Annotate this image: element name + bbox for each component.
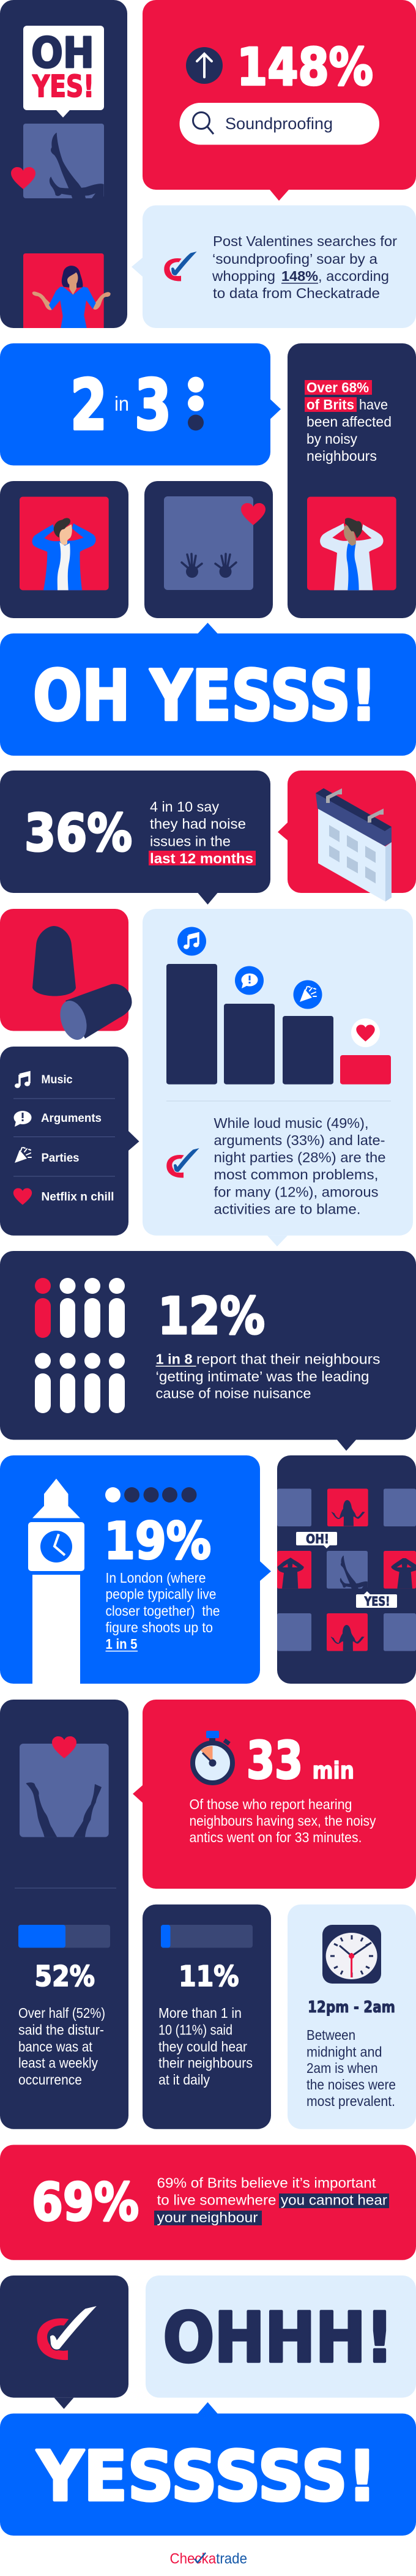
legend item: netflix n chill: Netflix n chill xyxy=(42,1191,114,1203)
text: post valentines: Post Valentines searches for xyxy=(213,233,397,249)
icon: big ben xyxy=(28,1479,84,1684)
text: in london: people typically live xyxy=(105,1586,217,1602)
illustration: legs in window xyxy=(23,124,104,198)
panel: yesssss banner xyxy=(0,2402,416,2536)
panel: 33 min xyxy=(133,1700,416,1889)
icon: heart circle xyxy=(351,1018,380,1047)
icon: music circle xyxy=(177,927,206,956)
logo: checkatrade: Checkatrade xyxy=(170,2551,247,2567)
icon: heart xyxy=(241,503,266,525)
illustration: man in white coat xyxy=(307,497,396,590)
icon: up arrow xyxy=(186,47,223,84)
text: in london xyxy=(105,1570,220,1652)
panel: apartment block xyxy=(277,1455,416,1684)
text: while loud music: arguments (33%) and late- xyxy=(214,1132,385,1148)
search bar: Soundproofing xyxy=(225,114,333,133)
panel: oh yes column xyxy=(0,0,127,328)
illustration: shrugging woman xyxy=(23,253,111,328)
text: post valentines: whopping xyxy=(212,268,275,284)
text: post valentines: 148% xyxy=(281,268,318,284)
text: while loud music: activities are to blame. xyxy=(214,1201,361,1217)
text: over half: said the distur- xyxy=(18,2022,104,2038)
text: 69% of brits: 69% of Brits believe it’s important xyxy=(157,2175,376,2191)
text: while loud music: most common problems, xyxy=(214,1167,378,1182)
windows grid xyxy=(277,1488,416,1651)
panel: logo tick xyxy=(0,2275,128,2409)
text: more than 1 in 10: at it daily xyxy=(158,2072,210,2088)
text: in london: 1 in 5 xyxy=(105,1636,137,1652)
icon: 8 people pictogram xyxy=(35,1278,125,1413)
text: 69% of brits: you cannot hear xyxy=(281,2192,387,2208)
text: over half: occurrence xyxy=(18,2072,82,2088)
panel: 148% search stat xyxy=(143,0,416,201)
text: 69% of brits: your neighbour xyxy=(157,2209,258,2225)
icon: clock xyxy=(322,1925,381,1984)
text: over half: Over half (52%) xyxy=(18,2005,105,2021)
panel: 19% london xyxy=(0,1455,271,1684)
text: 4 in 10: they had noise xyxy=(150,816,246,832)
text: more than 1 in 10: More than 1 in xyxy=(158,2005,242,2021)
icon: stopwatch xyxy=(193,1731,232,1783)
text: between midnight: 2am is when xyxy=(306,2060,378,2076)
panel: 12% one in eight xyxy=(0,1251,416,1450)
panel: yesssss banner: YESSSSS! xyxy=(36,2437,377,2517)
panel: 33 min: 33 xyxy=(247,1731,303,1791)
speech bubble: oh yes xyxy=(23,26,104,118)
icon: checkatrade tick white xyxy=(37,2306,97,2360)
panel: earplugs xyxy=(0,909,132,1043)
speech bubble: oh xyxy=(296,1531,337,1548)
text: over half xyxy=(18,2005,105,2088)
panel: ohhh xyxy=(146,2275,416,2398)
icon: earplug tilted xyxy=(56,984,132,1043)
progress bar: 52% xyxy=(18,1925,110,1947)
legend item: parties: Parties xyxy=(42,1152,80,1165)
icon: calendar xyxy=(316,788,392,902)
speech bubble: oh: OH! xyxy=(306,1531,329,1546)
panel: post valentines text xyxy=(132,206,416,328)
text: between midnight: the noises were xyxy=(306,2077,396,2093)
text: over 68%: Over 68% xyxy=(306,379,369,395)
panel: hands on window xyxy=(144,481,273,618)
icon: checkatrade tick xyxy=(164,252,197,281)
text: more than 1 in 10: their neighbours xyxy=(158,2055,253,2071)
text: over half: least a weekly xyxy=(18,2055,98,2071)
speech bubble: yes xyxy=(356,1591,397,1608)
text: of those: Of those who report hearing xyxy=(190,1796,352,1812)
panel: 2 in 3 xyxy=(0,343,281,465)
panel: 2 in 3: 2 xyxy=(70,365,107,446)
icon: party circle xyxy=(294,980,322,1009)
icon: heart xyxy=(11,167,35,189)
text: 1 in 8: ‘getting intimate’ was the leading xyxy=(155,1368,370,1384)
icon: earplug upright xyxy=(32,926,76,996)
text: post valentines: to data from Checkatrade xyxy=(213,285,380,301)
text: of those: antics went on for 33 minutes. xyxy=(190,1829,362,1845)
text: over 68%: of Brits xyxy=(306,397,354,413)
text: in london: In London (where xyxy=(105,1570,206,1586)
legend item: music xyxy=(15,1072,73,1088)
legend item: arguments xyxy=(13,1111,102,1127)
icon: heart xyxy=(52,1736,76,1758)
text: of those xyxy=(190,1796,376,1845)
bar chart xyxy=(166,964,391,1085)
panel: legs and 52% stat xyxy=(0,1700,128,2129)
panel: 12pm - 2am: 12pm - 2am xyxy=(308,1998,395,2017)
speech bubble: yes: YES! xyxy=(364,1594,390,1608)
panel: man in blue jacket xyxy=(0,481,128,618)
panel: 2 in 3: 3 xyxy=(135,365,171,446)
text: 1 in 8 xyxy=(155,1351,381,1402)
panel: 69%: 69% xyxy=(32,2173,139,2233)
text: 1 in 8: report that their neighbours xyxy=(196,1351,381,1367)
panel: 2 in 3: in xyxy=(114,392,129,415)
text: between midnight: midnight and xyxy=(306,2044,382,2060)
panel: oh yesss banner xyxy=(0,623,416,756)
panel: legend xyxy=(0,1047,139,1236)
text: 1 in 8: cause of noise nuisance xyxy=(155,1386,311,1402)
panel: 12% one in eight: 12% xyxy=(158,1286,265,1346)
icon: 1 in 5 dots xyxy=(105,1487,197,1503)
speech bubble: oh yes: YES! xyxy=(32,69,94,104)
text: in london: closer together) the xyxy=(105,1603,220,1619)
panel: over 68% of brits xyxy=(288,343,416,618)
text: over 68%: been affected xyxy=(306,414,392,430)
panel: 36% noise issues xyxy=(0,771,270,905)
text: 1 in 8: 1 in 8 xyxy=(155,1351,192,1367)
text: in london: figure shoots up to xyxy=(105,1619,213,1635)
text: 69% of brits: to live somewhere xyxy=(157,2192,277,2208)
text: more than 1 in 10: 10 (11%) said xyxy=(158,2022,232,2038)
text: over 68%: by noisy xyxy=(306,431,357,447)
text: while loud music: night parties (28%) are the xyxy=(214,1149,385,1165)
icon: argument circle xyxy=(235,966,264,995)
panel: noise causes bar chart xyxy=(143,909,413,1246)
icon: checkatrade tick xyxy=(166,1148,199,1178)
text: between midnight: most prevalent. xyxy=(306,2093,395,2109)
text: post valentines xyxy=(212,233,397,301)
text: over 68%: neighbours xyxy=(306,448,377,464)
panel: 19% london: 19% xyxy=(104,1512,211,1570)
text: 4 in 10: last 12 months xyxy=(150,851,253,867)
text: 4 in 10: issues in the xyxy=(150,834,231,849)
panel: calendar xyxy=(278,771,416,902)
speech bubble: oh yes: OH xyxy=(31,29,94,78)
text: while loud music: for many (12%), amorous xyxy=(214,1184,378,1200)
icon: hand prints xyxy=(182,554,236,578)
panel: 69% xyxy=(0,2145,416,2260)
progress bar: 11% xyxy=(161,1925,253,1947)
panel: 11% stat: 11% xyxy=(179,1960,239,1993)
text: of those: neighbours having sex, the noisy xyxy=(190,1813,376,1829)
legend item: music: Music xyxy=(42,1073,73,1086)
text: over half: bance was at xyxy=(18,2039,92,2055)
text: over 68% xyxy=(305,379,392,464)
text: between midnight: Between xyxy=(306,2027,355,2043)
text: while loud music: While loud music (49%), xyxy=(214,1115,368,1131)
stat: 148%: 148% xyxy=(237,37,373,97)
legend item: arguments: Arguments xyxy=(41,1112,102,1125)
text: post valentines: ‘soundproofing’ soar by a xyxy=(212,251,378,267)
legend item: netflix n chill xyxy=(13,1188,114,1205)
search bar xyxy=(180,103,379,144)
text: over 68%: have xyxy=(359,397,388,413)
text: while loud music xyxy=(214,1115,385,1217)
text: post valentines: , according xyxy=(318,268,389,284)
panel: 11% stat xyxy=(143,1905,271,2129)
text: 4 in 10: 4 in 10 say xyxy=(150,799,219,815)
text: more than 1 in 10: they could hear xyxy=(158,2039,247,2055)
illustration: legs up xyxy=(20,1744,109,1837)
icon: three dots xyxy=(188,377,204,431)
panel: 12pm - 2am xyxy=(288,1905,416,2129)
panel: legs and 52% stat: 52% xyxy=(34,1960,95,1993)
text: 4 in 10 xyxy=(149,799,256,867)
text: 69% of brits xyxy=(154,2175,389,2225)
text: more than 1 in 10 xyxy=(158,2005,253,2088)
legend item: parties xyxy=(15,1148,80,1165)
text: between midnight xyxy=(306,2027,396,2109)
panel: 36% noise issues: 36% xyxy=(24,803,132,863)
panel: 33 min: min xyxy=(312,1757,354,1784)
